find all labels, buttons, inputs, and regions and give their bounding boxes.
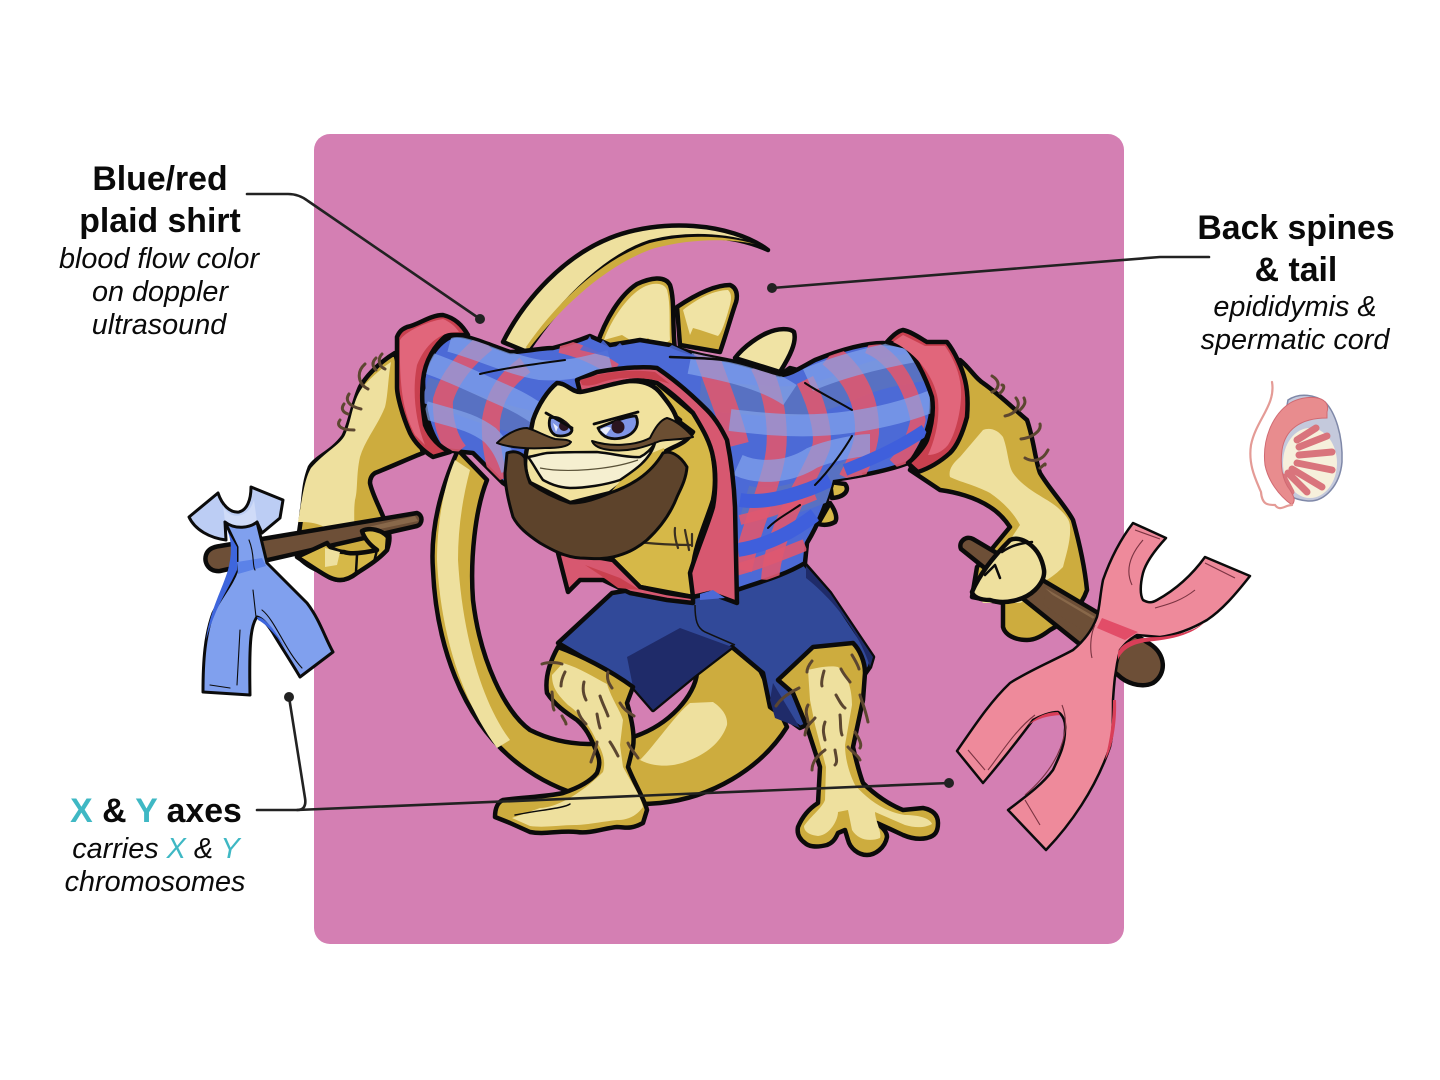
label: back spines and tail: Back spines xyxy=(1197,209,1395,247)
label: blue/red plaid shirt: blood flow color xyxy=(59,243,260,275)
left leg and foot xyxy=(495,647,647,833)
label: blue/red plaid shirt xyxy=(59,160,260,341)
lower shirt bands xyxy=(738,430,925,550)
shirt cuffs xyxy=(397,315,968,472)
moustache xyxy=(497,418,693,450)
label: back spines and tail: spermatic cord xyxy=(1201,324,1390,356)
leader line: plaid shirt xyxy=(247,194,485,324)
panel: pink background xyxy=(314,134,1124,944)
label: X and Y axes: X & Y axes xyxy=(70,792,242,830)
dress: blue X xyxy=(189,487,333,695)
label: blue/red plaid shirt: Blue/red xyxy=(92,160,228,198)
slate squares xyxy=(425,365,930,503)
left forearm and hand xyxy=(295,353,423,580)
right eye xyxy=(598,416,637,439)
back spines xyxy=(597,278,798,378)
light plaid stripes xyxy=(425,342,935,471)
leader lines: X and Y axes xyxy=(257,692,954,810)
stick left xyxy=(206,513,422,571)
beard xyxy=(505,452,687,559)
tail xyxy=(432,226,787,804)
red plaid stripes xyxy=(443,342,918,580)
label: back spines and tail: & tail xyxy=(1255,251,1337,289)
label: X and Y axes: carries X & Y xyxy=(72,833,242,865)
thumbnail: epididymis and spermatic cord xyxy=(1250,382,1342,508)
label: blue/red plaid shirt: plaid shirt xyxy=(79,202,241,240)
shorts xyxy=(558,562,873,728)
label: back spines and tail: epididymis & xyxy=(1213,291,1377,323)
right forearm and hand xyxy=(910,360,1087,640)
plaid shirt xyxy=(423,335,935,590)
label: blue/red plaid shirt: ultrasound xyxy=(92,309,227,341)
neck and chest xyxy=(600,381,715,597)
red hood collar xyxy=(558,367,737,603)
teeth xyxy=(528,443,655,488)
label: blue/red plaid shirt: on doppler xyxy=(92,276,229,308)
label: X and Y axes xyxy=(65,792,245,898)
dress: pink Y xyxy=(957,523,1250,850)
fist left hand xyxy=(297,529,388,580)
left eye xyxy=(549,417,572,436)
leader line: back spines xyxy=(767,257,1209,293)
stick right xyxy=(960,538,1163,685)
character illustration xyxy=(189,226,1250,855)
fingers right hand xyxy=(972,539,1095,632)
label: X and Y axes: chromosomes xyxy=(65,866,245,898)
label: back spines and tail xyxy=(1197,209,1395,356)
face xyxy=(497,381,693,559)
small fingers behind shirt xyxy=(818,482,847,525)
right leg and foot xyxy=(776,643,938,855)
